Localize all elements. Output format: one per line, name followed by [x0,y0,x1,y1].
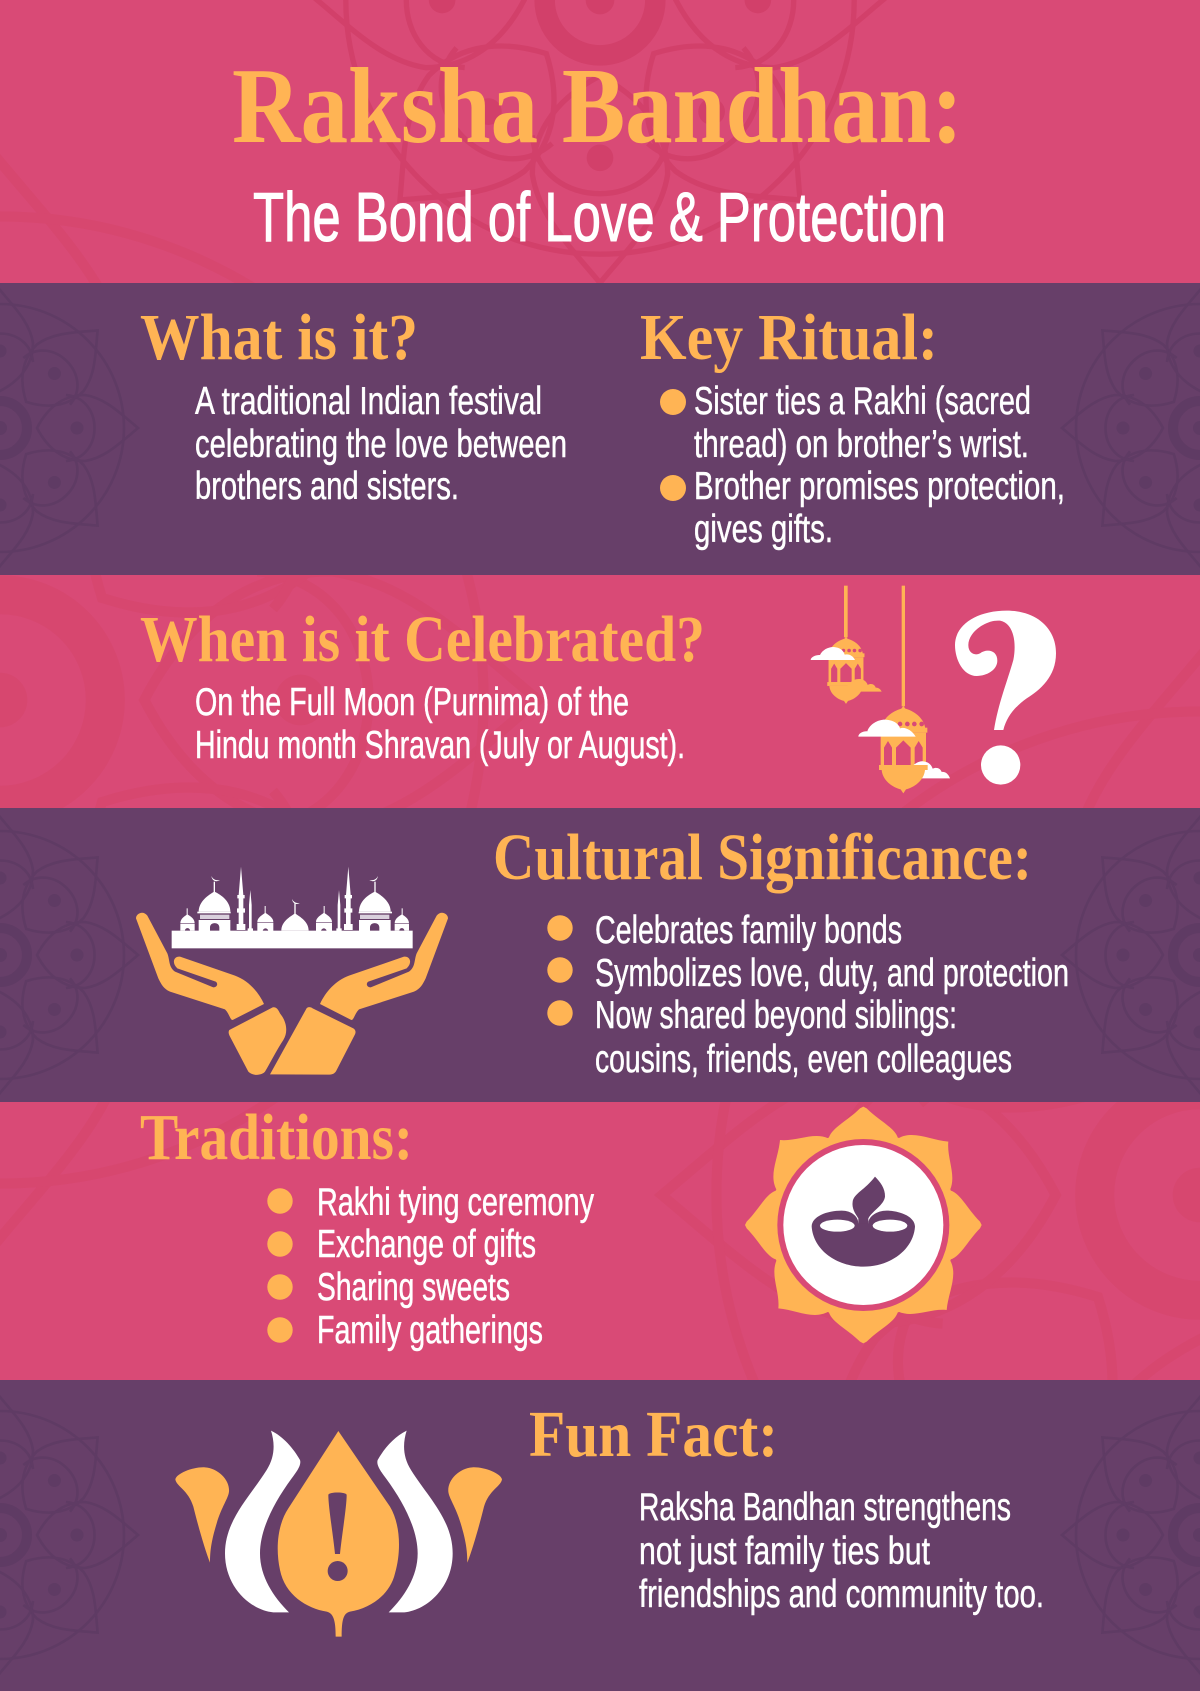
panel: cultural significance [0,808,1200,1102]
list: ritual steps: gives gifts. [694,508,833,551]
icon: hands holding mosque skyline [136,867,448,1075]
list: significance points: Now shared beyond siblings: [595,994,957,1037]
list: traditions: Exchange of gifts [317,1223,536,1266]
heading: cultural significance: Cultural Significance: [493,821,1032,894]
list: ritual steps [660,380,1065,551]
list: ritual steps: Brother promises protection, [694,465,1065,508]
heading: traditions: Traditions: [140,1101,413,1174]
panel: what is it and key ritual [0,283,1200,575]
panel: title header [0,0,1200,283]
text block: fun fact: not just family ties but [639,1530,930,1573]
heading: fun fact: Fun Fact: [529,1398,778,1471]
text block: date [195,681,685,767]
panel: fun fact [0,1380,1200,1691]
heading: what is it: What is it? [140,301,418,374]
text block: definition: celebrating the love between [195,423,567,466]
panel: traditions [0,1101,1200,1380]
text block: definition [195,380,567,508]
heading: key ritual: Key Ritual: [640,301,938,374]
title: Raksha Bandhan: [232,47,963,166]
list: ritual steps: thread) on brother’s wrist. [694,423,1029,466]
icon: hanging lanterns and question mark [811,586,1056,793]
text block: date: Hindu month Shravan (July or August). [195,724,685,767]
text block: fun fact [639,1486,1044,1616]
text block: definition: brothers and sisters. [195,465,459,508]
list: traditions [267,1181,594,1352]
text block: definition: A traditional Indian festival [195,380,542,423]
text block: fun fact: Raksha Bandhan strengthens [639,1486,1011,1529]
heading: when: When is it Celebrated? [140,603,705,676]
list: significance points: Celebrates family bonds [595,909,902,952]
list: ritual steps: Sister ties a Rakhi (sacred [694,380,1031,423]
list: significance points [547,909,1069,1081]
icon: diya lamp in lotus flower [745,1107,982,1343]
icon: lotus with exclamation mark [175,1431,502,1637]
list: traditions: Rakhi tying ceremony [317,1181,594,1224]
text block: fun fact: friendships and community too. [639,1573,1044,1616]
list: traditions: Sharing sweets [317,1266,510,1309]
text block: date: On the Full Moon (Purnima) of the [195,681,629,724]
list: significance points: cousins, friends, even colleagues [595,1038,1012,1081]
subtitle: The Bond of Love & Protection [253,178,946,256]
panel: when is it celebrated [0,575,1200,808]
list: traditions: Family gatherings [317,1309,543,1352]
